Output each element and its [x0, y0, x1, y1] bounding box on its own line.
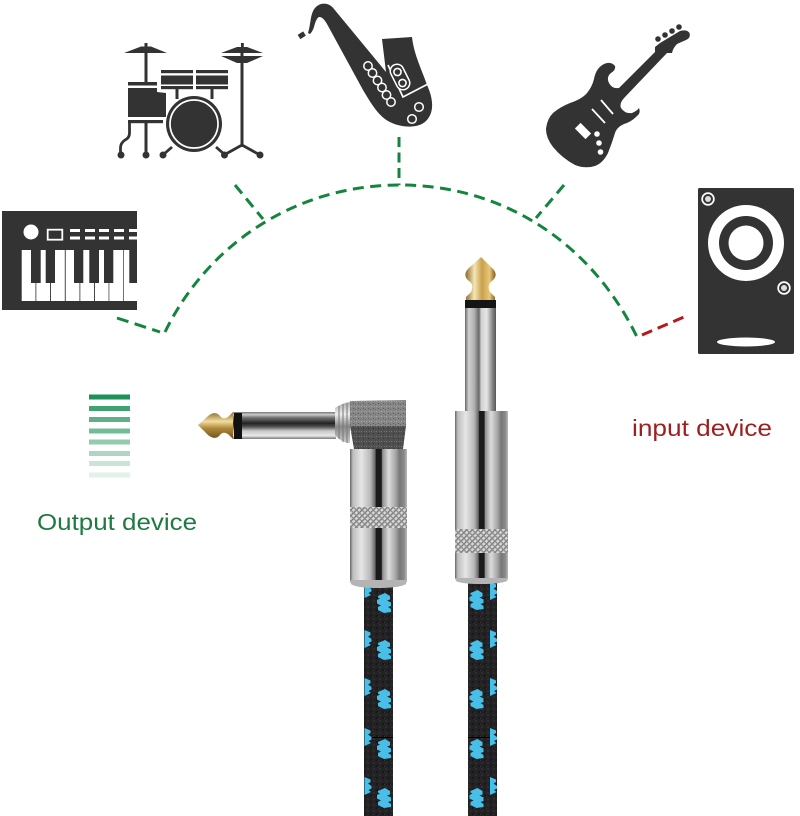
- right-angle plug: [198, 400, 407, 588]
- knurled band: [350, 507, 407, 528]
- barrel: [350, 449, 407, 582]
- icon: speaker: [698, 188, 794, 354]
- left cable: right-angle plug cord: [364, 580, 393, 816]
- barrel: [455, 411, 508, 579]
- gold tip: [465, 257, 496, 300]
- right cable: straight plug cord: [468, 580, 497, 816]
- shaft: [465, 300, 496, 412]
- knurled band: [455, 529, 508, 553]
- icon: drum kit: [118, 43, 264, 158]
- connection arc: green dashed lines: [117, 137, 637, 337]
- signal bars: fading green: [89, 394, 130, 478]
- collar: [335, 402, 350, 443]
- icon: keyboard: [2, 211, 137, 310]
- icon: saxophone: [299, 4, 432, 127]
- straight plug: [455, 257, 508, 584]
- icon: electric guitar: [546, 24, 690, 167]
- angled head: [350, 400, 406, 426]
- connection to input: red dashed line: [642, 317, 684, 335]
- label: output device: Output device: [37, 509, 197, 535]
- label: input device: input device: [632, 415, 772, 441]
- shaft: [233, 412, 336, 439]
- gold tip: [198, 412, 233, 439]
- collar ribs: [339, 403, 347, 443]
